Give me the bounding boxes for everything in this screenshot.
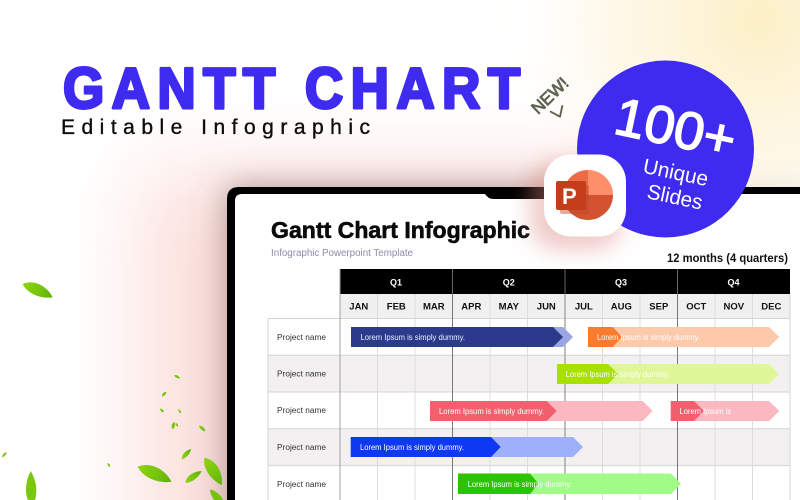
grid lines xyxy=(268,269,790,500)
icon: powerpoint xyxy=(544,154,626,236)
task bar: navy: Lorem Ipsum is simply dummy. xyxy=(360,333,465,342)
month header: SEP xyxy=(649,302,669,312)
project labels: Project name xyxy=(277,406,327,415)
month header: AUG xyxy=(611,302,632,312)
project labels xyxy=(277,333,327,489)
month header: JUL xyxy=(575,302,593,312)
month header xyxy=(340,294,790,318)
month header: NOV xyxy=(724,302,745,312)
duration label: 12 months (4 quarters) xyxy=(667,251,788,265)
month header: JAN xyxy=(349,302,368,312)
month header: APR xyxy=(461,302,481,312)
slide heading: Gantt Chart Infographic xyxy=(271,217,530,243)
project labels: Project name xyxy=(277,370,327,378)
month header: OCT xyxy=(686,302,707,312)
gantt chart xyxy=(268,269,790,500)
icon: powerpoint: P xyxy=(562,184,577,209)
badge: 100+ unique slides: Unique xyxy=(641,155,710,191)
task bar: blue xyxy=(351,437,583,457)
month header: MAY xyxy=(499,302,520,312)
task bar: green xyxy=(458,474,681,494)
green leaves xyxy=(1,278,227,500)
task bar: orange: Lorem Ipsum is simply dummy. xyxy=(597,333,700,342)
new badge: NEW! xyxy=(528,74,572,118)
project labels: Project name xyxy=(277,480,327,489)
month header: MAR xyxy=(423,302,445,312)
laptop screen frame xyxy=(227,187,800,500)
month header: DEC xyxy=(761,302,781,312)
badge: 100+ unique slides: 100+ xyxy=(610,87,741,170)
quarter header: Q3 xyxy=(615,278,627,288)
month header: FEB xyxy=(387,302,406,312)
row shading xyxy=(268,355,790,466)
quarter header: Q4 xyxy=(727,278,740,288)
task bar: red first: Lorem Ipsum is simply dummy. xyxy=(439,407,544,416)
subtitle: Editable Infographic xyxy=(61,116,370,139)
project labels: Project name xyxy=(277,333,327,342)
title: GANTT CHART xyxy=(63,56,520,120)
quarter header: Q2 xyxy=(503,278,515,288)
task bar: orange xyxy=(588,327,779,347)
badge: 100+ unique slides xyxy=(577,60,754,238)
month header: JUN xyxy=(537,302,556,312)
task bar: lime: Lorem Ipsum is simply dummy. xyxy=(566,370,669,379)
task bar: red first xyxy=(430,401,653,421)
task bar: green: Lorem Ipsum is simply dummy. xyxy=(468,480,572,489)
project labels: Project name xyxy=(277,443,327,452)
slide subheading: Infographic Powerpoint Template xyxy=(271,248,413,259)
quarter header xyxy=(340,269,790,294)
badge: 100+ unique slides: Slides xyxy=(645,180,705,215)
task bar: red second: Lorem Ipsum is xyxy=(680,407,731,416)
quarter header: Q1 xyxy=(390,278,402,288)
task bar: navy xyxy=(351,327,573,347)
task bar: lime xyxy=(557,364,779,384)
task bar: blue: Lorem Ipsum is simply dummy. xyxy=(360,443,464,452)
powerpoint icon glow xyxy=(530,160,622,250)
task bar: red second xyxy=(671,401,779,421)
